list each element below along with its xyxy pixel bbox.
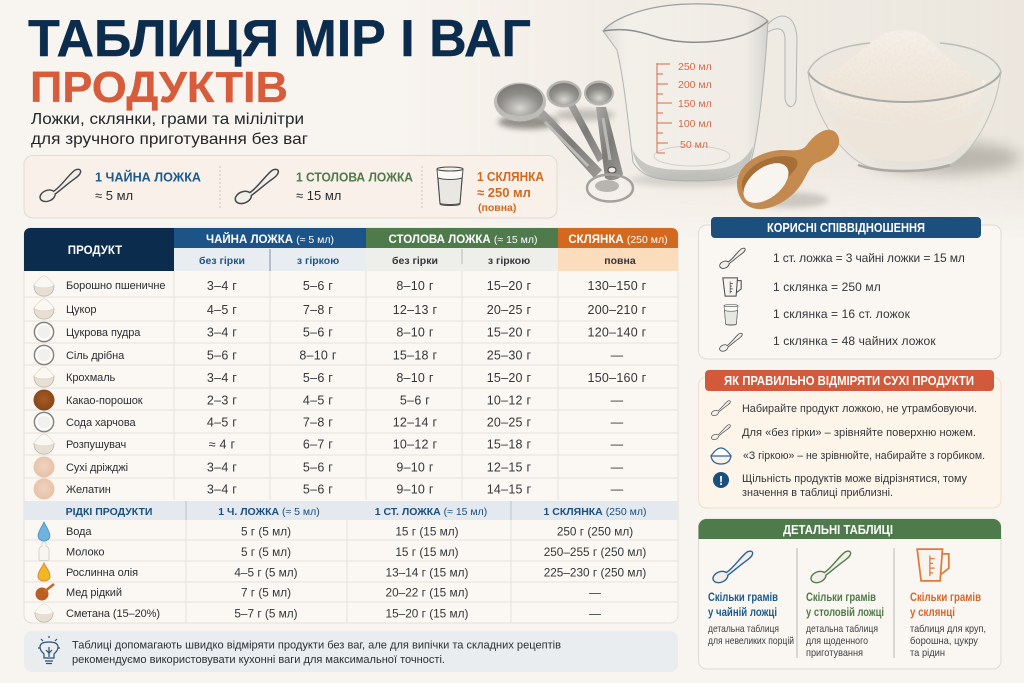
row: мед — [36, 584, 601, 600]
note text — [72, 640, 561, 666]
jug labels: 250 мл — [678, 61, 712, 73]
tips: значення в таблиці приблизні. — [742, 487, 893, 499]
row: вода — [38, 522, 633, 541]
column: tablespoon: приготування — [806, 647, 863, 659]
row: желатин: 5–6 г — [303, 482, 333, 496]
column: tablespoon — [806, 592, 884, 659]
icon: blue spoon — [711, 551, 753, 585]
table header — [24, 228, 678, 271]
row: дріжджі: Сухі дріжджі — [66, 462, 128, 474]
row: какао: 10–12 г — [487, 394, 531, 408]
row: желатин: 3–4 г — [207, 482, 237, 496]
row: сіль: Сіль дрібна — [66, 350, 125, 362]
unit: tablespoon: ≈ 15 мл — [296, 188, 341, 203]
icon: light bulb — [38, 636, 60, 664]
row: какао: — — [611, 394, 624, 408]
tips: Для «без гірки» – зрівняйте поверхню ножем. — [742, 427, 976, 439]
panel: main table — [24, 228, 678, 623]
row: желатин: 14–15 г — [487, 482, 531, 496]
table header: повна — [604, 255, 636, 267]
icon: orange jug — [917, 549, 949, 581]
column: tablespoon: Скільки грамів — [806, 592, 876, 604]
ratios: 1 ст. ложка = 3 чайні ложки = 15 мл — [773, 251, 965, 265]
row: дріжджі: — — [611, 460, 624, 474]
row: борошно: Борошно пшеничне — [66, 280, 165, 292]
row: цукрова пудра: Цукрова пудра — [66, 327, 141, 339]
icon: spoon — [719, 333, 742, 352]
row: цукор: 7–8 г — [303, 303, 333, 317]
panel: useful ratios — [698, 217, 1001, 359]
column: teaspoon: детальна таблиця — [708, 623, 779, 635]
row: крохмаль: 5–6 г — [303, 371, 333, 385]
ratios: 1 склянка = 16 ст. ложок — [773, 307, 911, 321]
row: сода: Сода харчова — [66, 417, 136, 429]
unit: glass: ≈ 250 мл — [477, 185, 531, 200]
row: розпушувач: — — [611, 438, 624, 452]
row: олія — [38, 563, 646, 581]
row: сметана: Сметана (15–20%) — [66, 608, 160, 620]
row: желатин: — — [611, 482, 624, 496]
table header: ПРОДУКТ — [68, 245, 122, 257]
icon: jug — [723, 278, 741, 296]
row: розпушувач — [34, 434, 624, 454]
row: какао — [34, 390, 624, 410]
jug labels: 150 мл — [678, 98, 712, 110]
ratios — [773, 251, 965, 348]
row: цукор: 12–13 г — [393, 303, 437, 317]
row: сіль: 15–18 г — [393, 348, 437, 362]
tips: Набирайте продукт ложкою, не утрамбовуючи. — [742, 403, 977, 415]
row: розпушувач: 6–7 г — [303, 438, 333, 452]
panel: detailed tables — [698, 519, 1001, 669]
column: tablespoon: для щоденного — [806, 635, 868, 647]
jug labels: 200 мл — [678, 79, 712, 91]
row: сіль: 8–10 г — [299, 348, 337, 362]
row: сіль: 5–6 г — [207, 348, 237, 362]
note text: рекомендуємо використовувати кухонні ваги для максимальної точності. — [72, 654, 445, 666]
row: цукрова пудра: 120–140 г — [588, 326, 647, 340]
row: молоко: 250–255 г (250 мл) — [544, 545, 646, 559]
row: борошно — [34, 276, 647, 296]
panel: unit strip — [24, 156, 557, 218]
icon: spoon — [711, 401, 730, 417]
table header: з гіркою — [488, 255, 530, 267]
heading line 1: ТАБЛИЦЯ МІР І ВАГ — [28, 10, 531, 68]
column: tablespoon: детальна таблиця — [806, 623, 878, 635]
row: сіль: 25–30 г — [487, 348, 531, 362]
row: дріжджі: 12–15 г — [487, 460, 531, 474]
photo: bowl of flour — [808, 30, 1020, 174]
row: дріжджі: 9–10 г — [396, 460, 434, 474]
liquid header: РІДКІ ПРОДУКТИ — [66, 506, 152, 518]
row: цукрова пудра: 8–10 г — [396, 326, 434, 340]
unit: teaspoon — [95, 170, 201, 203]
row: сода — [34, 412, 624, 432]
heading line 2: ПРОДУКТІВ — [30, 63, 288, 112]
row: вода: 5 г (5 мл) — [241, 524, 291, 538]
panel: how to measure — [698, 370, 1001, 508]
icon: spoon — [719, 248, 745, 270]
liquid header: 1 Ч. ЛОЖКА (≈ 5 мл) — [218, 506, 320, 518]
row: сода: — — [611, 416, 624, 430]
row: желатин: Желатин — [66, 484, 111, 496]
column: tablespoon: у столовій ложці — [806, 607, 884, 619]
row: какао: 2–3 г — [207, 394, 237, 408]
note text: Таблиці допомагають швидко відміряти продукти без ваг, але для випічки та складних рецептів — [72, 640, 561, 652]
row: сіль — [34, 345, 624, 365]
unit: tablespoon — [296, 170, 413, 203]
column: teaspoon — [708, 592, 794, 647]
row: олія: 4–5 г (5 мл) — [234, 566, 298, 580]
row: сметана — [35, 604, 601, 622]
row: сметана: 5–7 г (5 мл) — [234, 606, 298, 620]
tips — [742, 403, 985, 499]
table header: з гіркою — [297, 255, 339, 267]
row: розпушувач: ≈ 4 г — [209, 438, 235, 452]
tips: Щільність продуктів може відрізнятися, тому — [742, 473, 967, 485]
row: мед: 20–22 г (15 мл) — [386, 586, 469, 600]
row: молоко: Молоко — [66, 546, 104, 558]
row: борошно: 3–4 г — [207, 279, 237, 293]
row: цукор: 4–5 г — [207, 303, 237, 317]
column: glass: борошна, цукру — [910, 635, 979, 647]
icon: green spoon — [809, 551, 851, 585]
row: цукрова пудра: 3–4 г — [207, 326, 237, 340]
tips: «З гіркою» – не зрівнюйте, набирайте з горбиком. — [743, 450, 985, 462]
table header: без гірки — [199, 255, 245, 267]
icon: tablespoon — [233, 169, 278, 206]
row: вода: 250 г (250 мл) — [557, 524, 633, 538]
row: борошно: 15–20 г — [487, 279, 531, 293]
column: glass: та рідин — [910, 647, 945, 659]
icon: teaspoon — [38, 169, 81, 204]
row: крохмаль — [34, 367, 647, 387]
row: розпушувач: 10–12 г — [393, 438, 437, 452]
unit: glass — [477, 170, 544, 214]
row: борошно: 5–6 г — [303, 279, 333, 293]
row: цукор: 200–210 г — [588, 303, 647, 317]
header: ДЕТАЛЬНІ ТАБЛИЦІ — [783, 523, 893, 537]
jug scale — [657, 63, 672, 153]
icon: heaped mound — [711, 448, 731, 464]
heading pill — [705, 370, 994, 391]
row: сметана: — — [589, 606, 601, 620]
row: желатин: 9–10 г — [396, 482, 434, 496]
row: цукор: 20–25 г — [487, 303, 531, 317]
icon: glass — [724, 305, 738, 325]
jug labels — [678, 61, 712, 151]
row: вода: Вода — [66, 526, 92, 538]
column: teaspoon: для невеликих порцій — [708, 635, 794, 647]
row: олія: 225–230 г (250 мл) — [544, 566, 646, 580]
table header: СТОЛОВА ЛОЖКА (≈ 15 мл) — [388, 234, 538, 246]
row: какао: 4–5 г — [303, 394, 333, 408]
row: борошно: 8–10 г — [396, 279, 434, 293]
icon: spoon with knife — [711, 425, 730, 441]
row: какао: Какао-порошок — [66, 395, 143, 407]
ratios: 1 склянка = 48 чайних ложок — [773, 334, 936, 348]
column: glass: Скільки грамів — [910, 592, 981, 604]
icon: glass — [437, 167, 463, 206]
unit: glass: (повна) — [478, 202, 516, 214]
table header: без гірки — [392, 255, 438, 267]
row: сода: 4–5 г — [207, 416, 237, 430]
column: teaspoon: Скільки грамів — [708, 592, 778, 604]
heading pill — [711, 217, 981, 238]
heading pill: КОРИСНІ СПІВВІДНОШЕННЯ — [767, 221, 925, 235]
subtitle — [31, 111, 308, 148]
row: дріжджі — [34, 456, 624, 478]
row: цукор — [34, 299, 647, 319]
row: крохмаль: 150–160 г — [588, 371, 647, 385]
row: вода: 15 г (15 мл) — [395, 524, 459, 538]
row: сода: 12–14 г — [393, 416, 437, 430]
unit: teaspoon: 1 ЧАЙНА ЛОЖКА — [95, 170, 201, 184]
liquid header — [24, 501, 678, 520]
row: дріжджі: 3–4 г — [207, 460, 237, 474]
unit: glass: 1 СКЛЯНКА — [477, 170, 544, 184]
unit: teaspoon: ≈ 5 мл — [95, 188, 133, 203]
photo: measuring spoons — [494, 80, 633, 202]
row: молоко: 15 г (15 мл) — [395, 545, 459, 559]
row: сіль: — — [611, 348, 624, 362]
heading pill: ЯК ПРАВИЛЬНО ВІДМІРЯТИ СУХІ ПРОДУКТИ — [724, 374, 974, 388]
row: мед: Мед рідкий — [66, 587, 122, 599]
row: дріжджі: 5–6 г — [303, 460, 333, 474]
column: glass: у склянці — [910, 607, 955, 619]
ratios: 1 склянка = 250 мл — [773, 280, 881, 294]
jug labels: 50 мл — [680, 139, 708, 151]
row: мед: 7 г (5 мл) — [241, 586, 291, 600]
unit: tablespoon: 1 СТОЛОВА ЛОЖКА — [296, 170, 413, 184]
row: крохмаль: 8–10 г — [396, 371, 434, 385]
row: олія: Рослинна олія — [66, 567, 138, 579]
column: glass: таблиця для круп, — [910, 623, 986, 635]
column: glass — [910, 592, 986, 659]
table header: ЧАЙНА ЛОЖКА (≈ 5 мл) — [206, 233, 334, 246]
icon: warning — [713, 472, 729, 488]
header — [698, 519, 1001, 539]
row: мед: — — [589, 586, 601, 600]
row: сода: 7–8 г — [303, 416, 333, 430]
row: цукрова пудра: 5–6 г — [303, 326, 333, 340]
row: олія: 13–14 г (15 мл) — [386, 566, 469, 580]
subtitle: Ложки, склянки, грами та мілілітри — [31, 111, 304, 128]
row: крохмаль: 3–4 г — [207, 371, 237, 385]
row: цукрова пудра: 15–20 г — [487, 326, 531, 340]
row: молоко: 5 г (5 мл) — [241, 545, 291, 559]
photo: measuring jug — [603, 4, 797, 187]
hero photo: measuring tools — [494, 4, 1020, 211]
row: сода: 20–25 г — [487, 416, 531, 430]
row: молоко — [39, 542, 646, 560]
liquid header: 1 СКЛЯНКА (250 мл) — [544, 506, 646, 518]
row: розпушувач: Розпушувач — [66, 439, 126, 451]
row: цукор: Цукор — [66, 304, 96, 316]
row: крохмаль: Крохмаль — [66, 372, 116, 384]
row: цукрова пудра — [34, 322, 647, 342]
row: желатин — [34, 478, 624, 500]
column: teaspoon: у чайній ложці — [708, 607, 777, 619]
jug labels: 100 мл — [678, 118, 712, 130]
row: сметана: 15–20 г (15 мл) — [386, 606, 469, 620]
row: розпушувач: 15–18 г — [487, 438, 531, 452]
icon: warning: ! — [719, 473, 723, 488]
row: крохмаль: 15–20 г — [487, 371, 531, 385]
liquid header: 1 СТ. ЛОЖКА (≈ 15 мл) — [375, 506, 487, 518]
hero backdrop — [568, 0, 1024, 207]
callout: note — [24, 631, 678, 672]
photo: wooden scoop with salt — [736, 130, 839, 211]
table header: СКЛЯНКА (250 мл) — [568, 234, 668, 246]
subtitle: для зручного приготування без ваг — [31, 131, 308, 148]
row: борошно: 130–150 г — [588, 279, 647, 293]
row: какао: 5–6 г — [400, 394, 430, 408]
